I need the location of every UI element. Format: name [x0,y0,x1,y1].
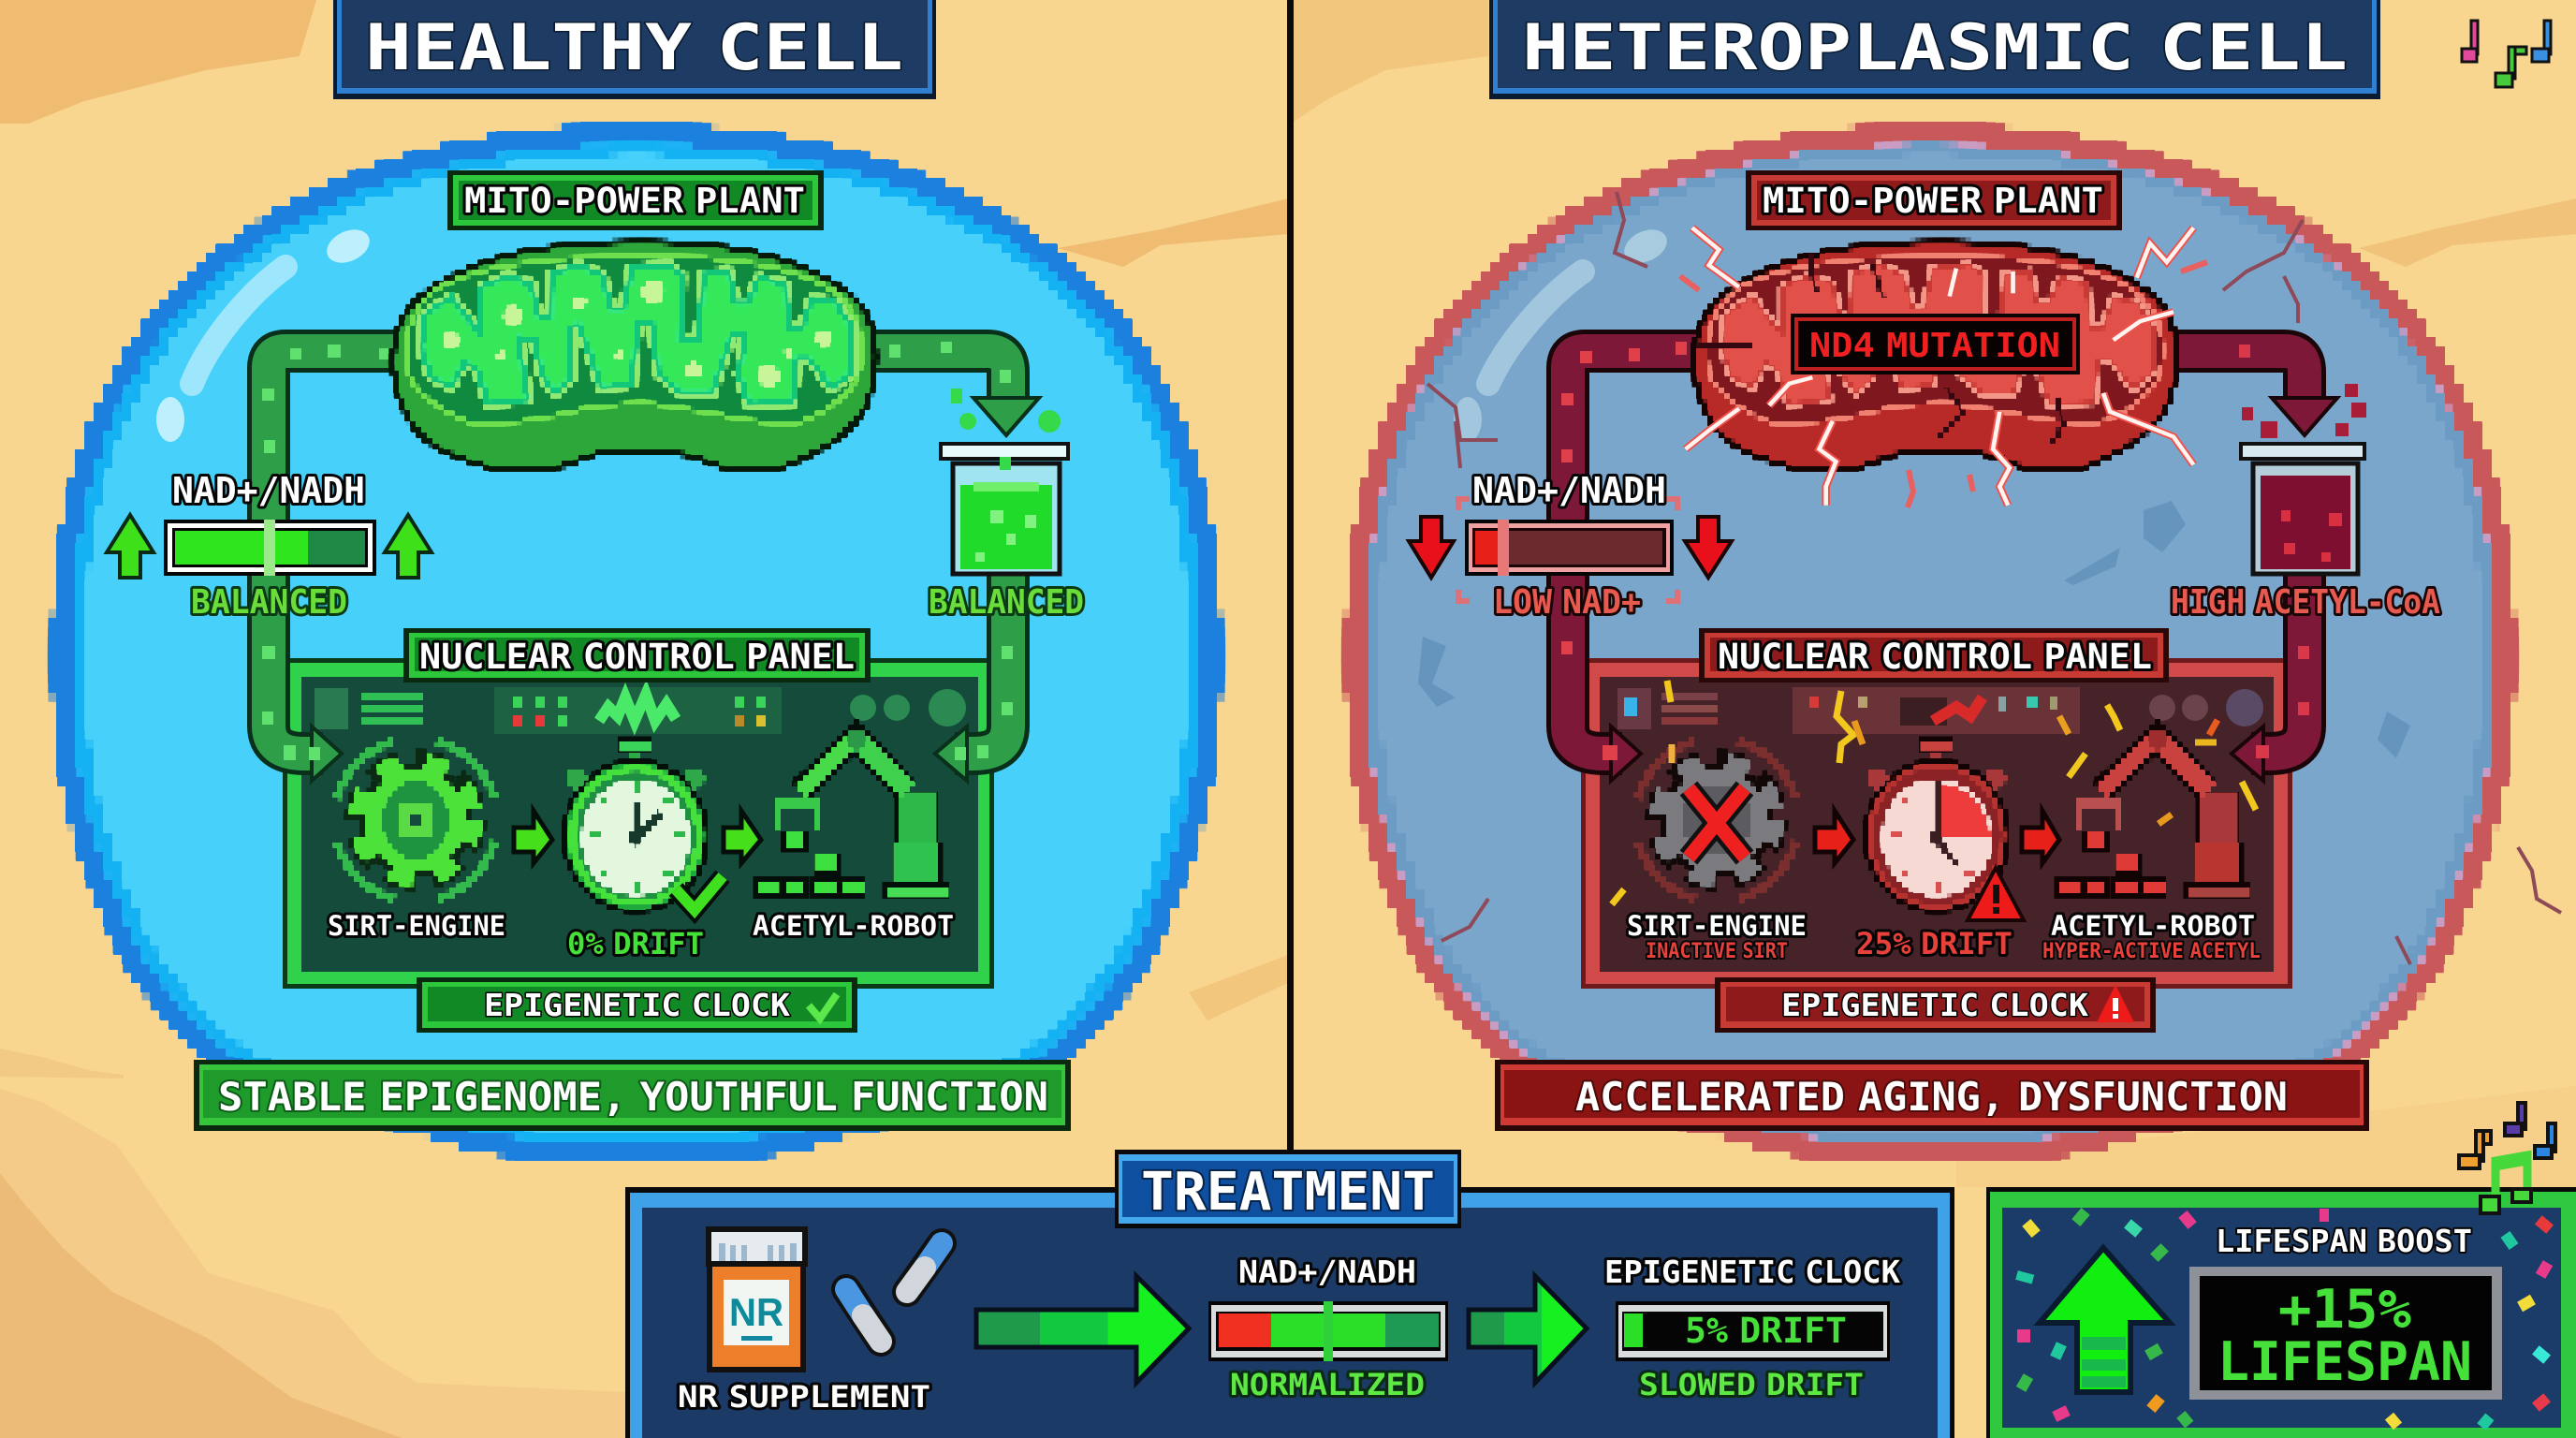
nuclear control panel [283,658,994,989]
icon: NR bottle: NR [729,1290,783,1334]
icon: broken gear [1617,720,1817,920]
gauge bar [1208,1301,1448,1361]
membrane highlights [1454,223,1673,442]
banner: accelerated aging: ACCELERATED AGING, DYSFUNCTION [1575,1074,2288,1120]
icon: beaker of acetyl-CoA [941,389,1068,574]
arrow: clock to robot [724,811,761,863]
icon: red X [1689,788,1745,858]
ND4 mutation tag [1791,314,2080,374]
banner: accelerated aging [1495,1060,2369,1131]
treatment tab [1115,1150,1461,1228]
label: NAD+/NADH: NAD+/NADH [1472,470,1666,511]
label: mito power plant [1746,170,2122,230]
icon: damaged mitochondrion [1680,227,2207,507]
NAD gauge [107,470,432,622]
drift bar: 5% DRIFT [1685,1311,1847,1351]
gauge bar [1465,520,1674,576]
membrane cracks [1427,192,2561,964]
label: 25 percent drift: 25% DRIFT [1856,926,2012,961]
icon: acetyl robot, hyperactive [2057,728,2249,897]
epigenetic clock bar [417,977,857,1033]
drift bar [1616,1301,1890,1361]
label: balanced left: BALANCED [191,583,347,622]
icon: big up arrow [2040,1248,2170,1392]
lightning bolts [1686,227,2193,506]
ND4 mutation tag: ND4 MUTATION [1809,327,2060,365]
title: healthy cell: HEALTHY CELL [365,11,903,85]
label: NR supplement: NR SUPPLEMENT [678,1379,930,1415]
arrow up right [385,515,432,578]
membrane highlights [156,223,375,442]
label: acetyl robot: ACETYL-ROBOT [2051,910,2255,942]
title: heteroplasmic cell: HETEROPLASMIC CELL [1522,11,2348,85]
blue stains [1418,501,2410,758]
arrow: supplement to NAD [976,1276,1189,1383]
label: NAD+/NADH: NAD+/NADH [1238,1254,1416,1290]
arrow down left [1409,517,1454,578]
label: mito power plant [447,170,824,230]
label: nuclear control panel: NUCLEAR CONTROL PANEL [419,637,855,677]
check mark fill [676,876,723,910]
panel: lifespan boost [1986,1187,2576,1438]
confetti [2015,1208,2554,1431]
icon: beaker of excess acetyl-CoA [2241,384,2366,574]
banner: stable epigenome: STABLE EPIGENOME, YOUTHFUL FUNCTION [218,1074,1048,1120]
icon: acetyl robot [756,728,948,897]
treatment tab: TREATMENT [1141,1162,1435,1223]
arrow: NAD to clock [1469,1276,1587,1383]
icon: pill one [907,1243,942,1292]
damaged cell membrane [1355,134,2505,1153]
epigenetic clock bar: EPIGENETIC CLOCK [484,987,790,1023]
readout: +15% lifespan: LIFESPAN [2217,1331,2472,1393]
panel: healthy cell [62,134,1211,1153]
label: normalized: NORMALIZED [1230,1367,1425,1402]
pipe: mitochondrion to NAD and gear [1561,342,1699,781]
readout: +15% lifespan: +15% [2278,1279,2411,1341]
epigenetic clock bar [1715,977,2156,1033]
label: nuclear control panel: NUCLEAR CONTROL PANEL [1718,637,2152,677]
nuclear control panel, damaged [1581,658,2292,989]
panel: treatment [625,1150,1954,1438]
icon: stopwatch, drifted [1866,740,2008,911]
label: mito power plant: MITO-POWER PLANT [464,181,805,221]
red X fill [1689,788,1745,858]
label: nuclear control panel [1699,628,2169,682]
readout: +15% lifespan [2189,1267,2502,1400]
label: mito power plant: MITO-POWER PLANT [1763,181,2103,221]
pipe: mitochondrion to NAD and gear [262,345,402,781]
label: inactive sirt: INACTIVE SIRT [1646,940,1788,963]
small red bolts below [1680,262,2207,507]
arrow: clock to robot [2022,811,2059,863]
title: heteroplasmic cell [1489,0,2380,99]
arrow down right [1685,517,1732,578]
epigenetic clock readout [1604,1254,1900,1402]
label: balanced right: BALANCED [929,583,1084,622]
banner: stable epigenome [194,1060,1071,1131]
arrow up left [107,515,154,578]
label: low NAD+: LOW NAD+ [1493,583,1641,622]
alarm brackets [1458,499,1677,601]
label: zero drift: 0% DRIFT [567,926,704,961]
pipe: mitochondrion to beaker and clock [2172,345,2337,781]
icon: music notes bottom [2459,1103,2555,1213]
cell membrane [62,134,1211,1153]
label: slowed drift: SLOWED DRIFT [1639,1367,1864,1402]
gauge bar [164,520,376,576]
sparks [1612,681,2256,904]
label: acetyl robot: ACETYL-ROBOT [753,910,954,942]
label: high acetyl-CoA: HIGH ACETYL-CoA [2171,583,2440,622]
epigenetic clock bar: EPIGENETIC CLOCK [1781,987,2088,1023]
icon: pill two [846,1289,881,1342]
label: lifespan boost: LIFESPAN BOOST [2216,1223,2472,1259]
NAD gauge, normalized [1208,1254,1448,1402]
icon: stopwatch [564,740,707,911]
label: sirt engine: SIRT-ENGINE [1627,910,1807,942]
panel status module [1617,687,2263,734]
label: sirt engine: SIRT-ENGINE [328,910,505,942]
icon: music notes top [2462,21,2551,87]
icon: healthy mitochondrion [393,242,875,470]
center divider [1287,0,1294,1153]
arrow: gear to clock [1815,811,1853,863]
icon: NR bottle [709,1229,805,1370]
icon: check mark [676,876,723,910]
pipe: mitochondrion to beaker and clock [871,342,1039,781]
icon: sirt gear [315,720,516,920]
icon: warning triangle [1968,868,2024,920]
panel status module [315,687,966,734]
title: healthy cell [333,0,936,99]
NAD gauge, low [1409,470,1732,622]
panel: heteroplasmic cell [1355,134,2561,1153]
label: nuclear control panel [403,628,871,682]
arrow: gear to clock [514,811,552,863]
label: epigenetic clock: EPIGENETIC CLOCK [1604,1254,1900,1290]
label: hyper-active acetyl: HYPER-ACTIVE ACETYL [2042,940,2261,963]
label: NAD+/NADH: NAD+/NADH [172,470,365,511]
